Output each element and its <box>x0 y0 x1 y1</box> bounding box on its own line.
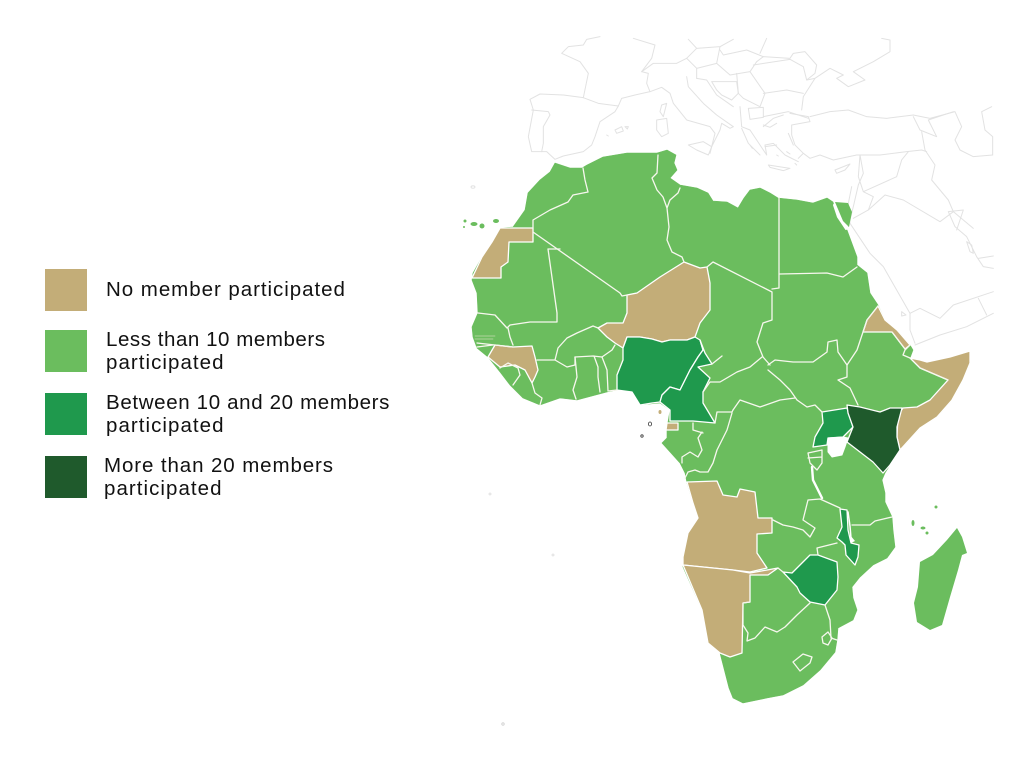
country: Kenya <box>847 405 902 473</box>
map: internal country borders <box>475 155 948 671</box>
country: Equatorial Guinea <box>666 423 678 430</box>
map: Madagascar <box>914 528 967 630</box>
legend label: less than 10: participated <box>106 351 225 374</box>
country: Western Sahara <box>472 228 533 278</box>
country: Guinea <box>488 345 538 383</box>
country: Eritrea <box>863 306 910 349</box>
map: small islands <box>471 186 652 725</box>
country: Cameroon <box>660 340 715 423</box>
legend swatch: between 10 and 20 <box>45 393 87 435</box>
legend swatch: less than 10 <box>45 330 87 372</box>
legend label: less than 10 <box>106 328 326 374</box>
country: Nigeria <box>617 337 703 405</box>
legend label: between 10 and 20: participated <box>106 414 225 437</box>
country: Malawi <box>837 509 859 565</box>
map: no member countries (tan) <box>472 228 970 657</box>
legend label: between 10 and 20: Between 10 and 20 members <box>106 391 390 414</box>
country: Angola <box>683 481 772 572</box>
legend label: more than 20: participated <box>104 477 223 500</box>
legend swatch: more than 20 <box>45 456 87 498</box>
map: 10 to 20 member countries <box>617 337 859 605</box>
legend <box>45 269 390 500</box>
country: Bioko <box>658 410 662 414</box>
legend label: less than 10: Less than 10 members <box>106 328 326 351</box>
country: Niger <box>598 262 710 348</box>
map: Cape Verde and Indian Ocean islands <box>463 219 938 534</box>
map: Africa base land <box>472 150 970 703</box>
legend label: more than 20: More than 20 members <box>104 454 334 477</box>
map: Sinai <box>835 202 852 227</box>
legend label: more than 20 <box>104 454 334 500</box>
country: Zimbabwe <box>783 555 838 605</box>
legend label: no member: No member participated <box>106 278 346 301</box>
country: Namibia <box>683 565 778 657</box>
country: Somalia <box>897 351 970 450</box>
map: Europe and Middle East outlines <box>528 37 993 228</box>
legend swatch: no member <box>45 269 87 311</box>
legend label: between 10 and 20 <box>106 391 390 437</box>
country: Uganda <box>813 408 853 447</box>
map: lakes <box>812 205 855 543</box>
